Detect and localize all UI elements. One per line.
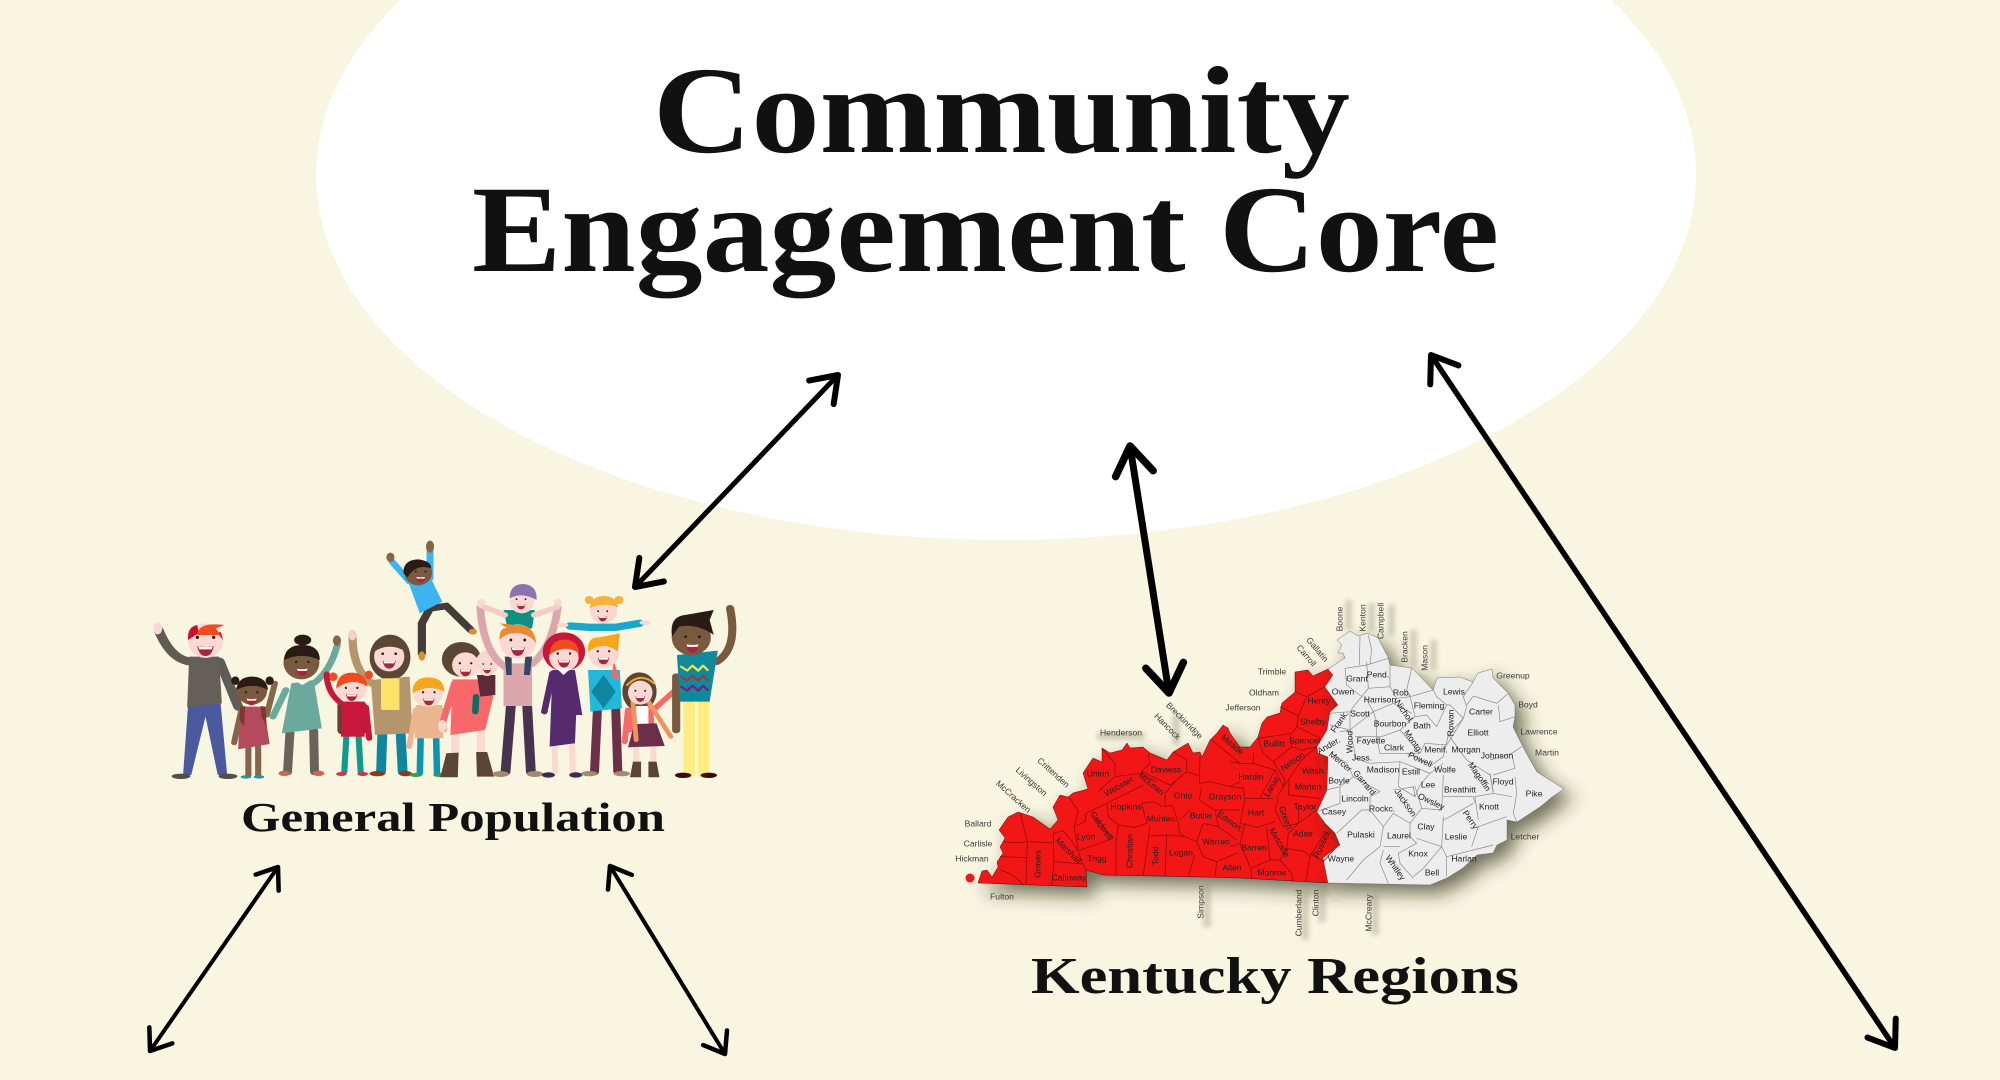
map: county labels: Wood [1344,731,1354,753]
map: county labels: Henry [1308,695,1331,705]
map: county labels: Calloway [1052,872,1087,882]
map: county labels: Leslie [1445,831,1467,841]
map: county labels: Barren [1241,842,1267,852]
map shape: red western counties [978,669,1340,887]
woman in coral dress with baby [438,642,499,777]
map: county labels: Lyon [1077,831,1095,841]
map: county labels: Shelby [1300,716,1327,726]
map: labels outside the state: Carlisle [964,838,993,848]
map shape: white eastern counties [1317,631,1564,885]
map: labels outside the state: Kenton [1357,604,1367,632]
map: county labels: Scott [1350,708,1370,718]
background oval [316,0,1696,540]
man in teal t-shirt [672,608,732,778]
man in grey shirt [153,622,238,779]
map: county labels: Caldwell [1088,809,1115,842]
map: county labels: Rowan [1445,709,1455,736]
map: county labels: Union [1087,768,1109,778]
jumping boy [386,541,477,661]
map: county labels: Butler [1190,810,1212,820]
arrow: general population to lower right [610,866,725,1054]
map: county labels: Nelson [1279,750,1307,773]
map: county labels: Owsley [1416,791,1447,812]
arrow: core to general population [635,375,838,587]
map: labels outside the state: Henderson [1100,727,1142,737]
arrow: core to Kentucky regions [1130,446,1169,693]
title: Community [653,42,1350,179]
map: county labels: Laurel [1387,830,1411,840]
map: labels outside the state: Martin [1535,747,1559,757]
map: county labels: Fayette [1357,735,1386,745]
map: county labels: Edmon. [1215,809,1245,834]
map: labels outside the state [955,603,1559,936]
map: county labels: Wolfe [1434,764,1456,774]
map: labels outside the state: Hancock [1152,711,1183,742]
map: western county lines [1000,740,1240,885]
map: county labels: Pike [1526,788,1543,798]
map: county labels: Jess. [1352,752,1372,762]
boy in peach hoodie [409,677,446,777]
map: county labels: Menif. [1424,744,1448,754]
map: labels outside the state: Simpson [1195,885,1205,919]
map: county labels: Pend. [1367,669,1389,679]
map: county labels: Owen [1332,686,1354,696]
woman in tan cardigan [348,630,412,776]
map: county labels: Carter [1469,706,1493,716]
map: county labels: Johnson [1481,750,1513,760]
map: county labels: Bourbon [1374,718,1406,728]
map: county labels: Bullitt [1263,738,1285,748]
map: county labels: Bath [1413,720,1431,730]
map: county labels: Madison [1367,764,1399,774]
map: labels outside the state: Bracken [1399,631,1409,663]
map: central county lines [1230,687,1337,882]
map: county labels: Montg. [1402,728,1425,755]
map: county labels: Rockc. [1369,803,1395,813]
map: county labels: Meade [1219,732,1246,757]
map: county labels: Metcalfe [1267,826,1292,859]
map: labels outside the state: Carroll [1295,643,1319,669]
map: county labels: Daviess [1151,764,1181,774]
map: labels outside the state: Campbell [1375,603,1385,639]
map: labels outside the state: Letcher [1511,831,1539,841]
map: county labels: Nichol. [1393,698,1416,725]
map: county labels: Estill [1402,766,1420,776]
map: labels outside the state: Ballard [965,818,992,828]
map: labels outside the state: Boone [1334,606,1344,631]
map: county labels: Marshall [1053,835,1084,866]
map: county labels [1032,669,1543,883]
map: county labels: Taylor [1294,801,1317,811]
map: county labels: Russell [1311,830,1332,860]
map: labels outside the state: McCracken [994,778,1033,815]
map: labels outside the state: Livingston [1014,765,1049,798]
map: labels outside the state: Greenup [1496,670,1530,680]
map: county labels: Hardin [1238,771,1264,781]
map: eastern county lines [1317,635,1522,883]
map: county labels: Christian [1124,834,1134,868]
map: county labels: Breathitt [1444,784,1477,794]
map: county labels: Whitley [1383,853,1408,883]
map: county labels: Knott [1479,801,1500,811]
map: labels outside the state: Clinton [1310,889,1320,916]
map: county labels: Logan [1169,847,1193,857]
map: labels outside the state: Jefferson [1225,702,1261,712]
map: county labels: Floyd [1492,776,1514,786]
map: county labels: Grant [1346,673,1368,683]
map: county labels: Knox [1408,848,1428,858]
map: county labels: Harrison [1364,694,1396,704]
map: county labels: Todd [1150,846,1160,865]
map: county labels: Clay [1417,821,1435,831]
map: labels outside the state: Boyd [1518,699,1538,709]
map: county labels: Allen [1222,862,1242,872]
map: county labels: Ohio [1174,790,1192,800]
map: county labels: Muhlen. [1147,813,1177,823]
map: county labels: Trigg [1087,853,1107,863]
map: county labels: Elliott [1467,727,1489,737]
label: Kentucky Regions: Kentucky Regions [1031,948,1519,1005]
map: county labels: Ander. [1315,735,1342,756]
title: Engagement Core [472,161,1499,299]
map: small red dot [966,874,974,882]
map: county labels: Graves [1032,850,1042,878]
map: county labels: McLean [1137,770,1167,797]
map: labels outside the state: Cumberland [1293,889,1303,936]
map: county labels: Hopkins [1110,801,1142,811]
map: county labels: Harlan [1451,853,1477,863]
map: labels outside the state: Lawrence [1520,726,1558,736]
map: county labels: Pulaski [1347,829,1375,839]
map: county labels: Wash. [1302,765,1326,775]
map: county labels: Powell [1407,749,1434,769]
map: county labels: Wayne [1328,853,1354,863]
map: county labels: Lincoln [1341,793,1369,803]
map: county labels: Monroe [1257,867,1287,877]
map: labels outside the state: Oldham [1249,687,1279,697]
arrow: general population to lower left [150,867,278,1051]
map: county labels: Magoffin [1466,760,1493,793]
map: labels outside the state: Trimble [1258,666,1286,676]
map: county labels: Perry [1461,808,1481,831]
map: county labels: Morgan [1451,744,1481,754]
man in pink sweater carrying child [477,584,562,777]
title [472,42,1499,299]
man in blue argyle shirt with child [557,596,651,776]
map: labels outside the state: Mason [1419,645,1429,671]
girl in rose dress [231,676,275,779]
woman in purple dress [542,632,585,778]
map: labels outside the state: Crittenden [1035,755,1072,790]
map: labels outside the state: McCreary [1363,894,1373,932]
map: county labels: Spencer [1289,735,1321,745]
arrow: core to lower right [1431,355,1895,1048]
map: county labels: Fleming [1414,700,1444,710]
map: county labels: Hart [1248,807,1265,817]
map: county labels: Lewis [1443,686,1465,696]
map: county labels: Rob. [1393,687,1411,697]
woman in teal dress [273,635,341,776]
map: county labels: Green [1277,805,1295,831]
map: county labels: Garrard [1351,768,1378,797]
map: county labels: Warren [1202,836,1230,846]
map: county labels: Larue [1262,774,1281,799]
map: soft label shadows outside the state [1097,600,1437,940]
map: county labels: Frank. [1328,709,1350,734]
map: county labels: Clark [1384,742,1405,752]
map: county labels: Lee [1421,779,1435,789]
girl in coral jacket [622,672,687,777]
map: county labels: Grayson [1209,791,1241,801]
map: county labels: Casey [1322,806,1347,816]
map: labels outside the state: Gallatin [1304,635,1331,664]
map: county labels: Bell [1425,867,1439,877]
map: labels outside the state: Fulton [990,891,1014,901]
map: county labels: Boyle [1328,775,1350,785]
map: county labels: Mercer [1327,749,1354,774]
map: Kentucky regions [955,600,1564,940]
map: county labels: Marion [1295,781,1321,791]
map: labels outside the state: Breckinridge [1164,700,1205,741]
map: county labels: Jackson [1392,787,1419,819]
map: county labels: Webster [1102,774,1135,799]
map: county labels: Adair [1293,828,1313,838]
map: labels outside the state: Hickman [955,853,989,863]
illustration: group of people [153,541,732,779]
girl in red jumper [327,671,373,776]
label: General Population: General Population [241,794,665,840]
